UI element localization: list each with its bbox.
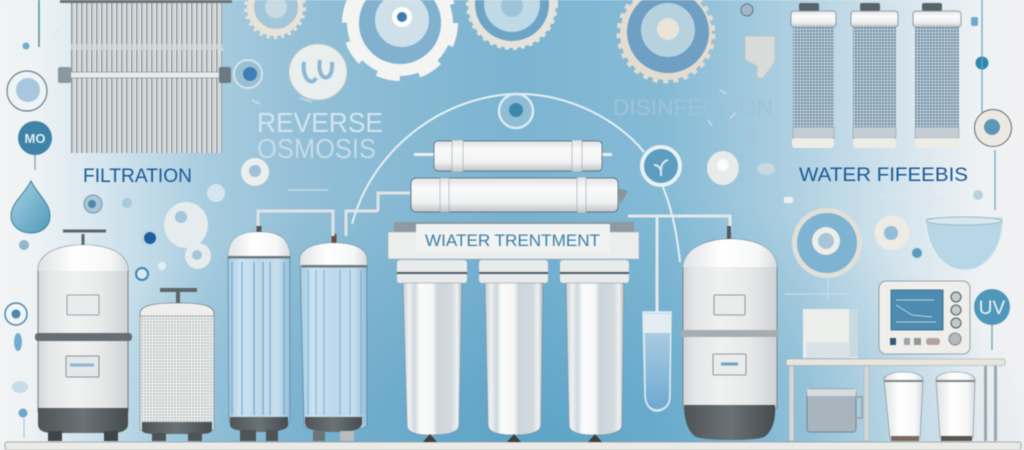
label: water treatment: WIATER TRENTMENT xyxy=(425,231,600,250)
outlet pipe and tee xyxy=(628,216,730,312)
heading: reverse osmosis: OSMOSIS xyxy=(257,133,376,164)
icon: blue badge xyxy=(18,121,52,170)
icon: small gear top xyxy=(247,0,303,36)
blue tank 2 xyxy=(300,234,367,441)
cartridge 1 xyxy=(791,3,836,148)
small disc xyxy=(874,216,910,250)
icon: right side vertical line xyxy=(982,0,995,210)
table xyxy=(786,359,1005,441)
mesh filter xyxy=(140,290,214,441)
icon: drip line xyxy=(785,278,850,300)
icon: molecule badge xyxy=(7,71,47,111)
teal dot xyxy=(912,248,922,258)
heading: water filters: WATER FIFEEBIS xyxy=(799,165,968,186)
heading: filtration: FILTRATION xyxy=(83,166,192,187)
cartridge 2 xyxy=(851,3,898,148)
small canister 2 xyxy=(936,372,975,441)
icon: round badge right xyxy=(974,110,1012,146)
heading: disinfection: DISINFECTION xyxy=(613,95,773,120)
connecting pipes xyxy=(258,193,410,236)
icon: arc top badge xyxy=(499,94,533,128)
UV badge xyxy=(974,289,1010,350)
test tube xyxy=(643,312,671,411)
icon: left vertical line xyxy=(38,0,40,47)
icon: gear top center xyxy=(468,0,556,48)
icon: plant badge xyxy=(642,147,680,185)
icon: round badge xyxy=(234,60,262,88)
icon: patterned gear right xyxy=(620,0,712,80)
control monitor xyxy=(879,281,970,354)
panel: water filter cartridges xyxy=(791,3,961,148)
left white tank xyxy=(35,231,132,441)
icon: droplet small top left xyxy=(22,42,30,50)
icon: white gear xyxy=(351,0,449,72)
heading: reverse osmosis xyxy=(257,107,383,164)
blue tank 1 xyxy=(228,226,290,441)
treatment unit manifold xyxy=(388,222,639,259)
arc line xyxy=(352,94,680,262)
glass bowl xyxy=(925,217,1003,270)
UV badge: UV xyxy=(979,298,1006,319)
icon: small badge xyxy=(241,158,269,186)
white container xyxy=(803,309,858,358)
heading: reverse osmosis: REVERSE xyxy=(257,107,383,138)
cartridge 3 xyxy=(913,3,961,148)
right white tank xyxy=(681,226,779,440)
icon: large water drop xyxy=(11,181,50,233)
gauge disc xyxy=(792,208,862,278)
icon: blue badge: MO xyxy=(25,131,45,146)
RO membrane upper xyxy=(414,140,612,172)
filter housing 1 xyxy=(397,260,467,442)
icon: large white badge xyxy=(289,44,347,100)
panel: filtration membrane xyxy=(58,0,232,153)
small canister 1 xyxy=(884,372,923,441)
RO membrane lower xyxy=(411,177,628,213)
shelf base xyxy=(5,442,1021,450)
filter housing 2 xyxy=(479,260,548,442)
beaker xyxy=(807,389,862,432)
filter housing 3 xyxy=(560,260,629,442)
